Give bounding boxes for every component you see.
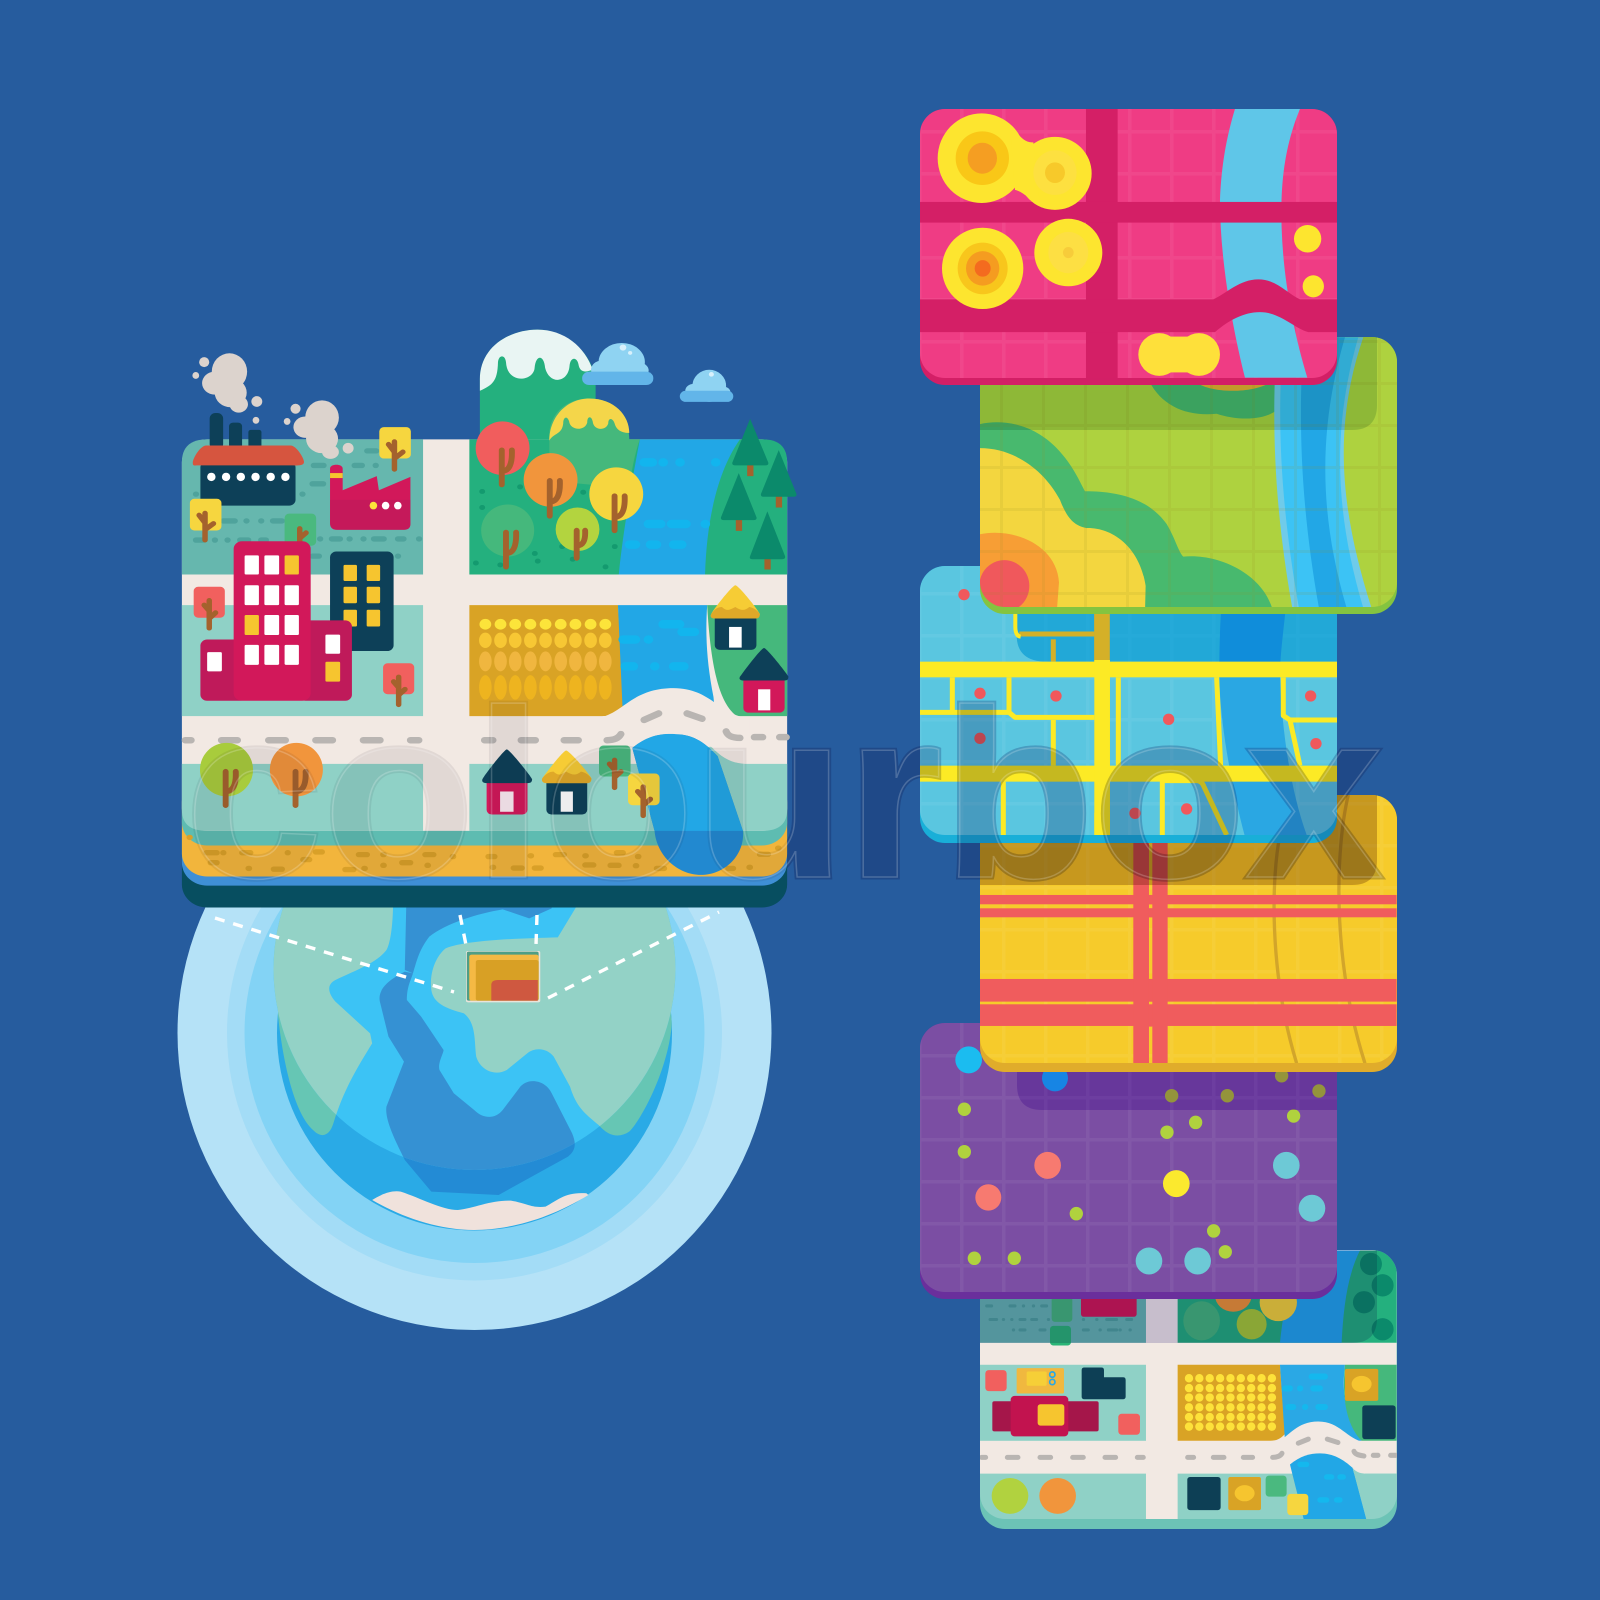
card lip blue <box>920 566 1337 843</box>
riverside square trees <box>599 746 660 816</box>
polar ice <box>372 1191 588 1230</box>
card: green elevation map <box>979 337 1397 614</box>
card: pink heat map <box>920 109 1337 385</box>
watermark: colourbox <box>185 660 1383 928</box>
shadow from green card <box>1016 614 1337 662</box>
yellow card face <box>980 795 1397 1063</box>
watermark <box>192 700 1386 882</box>
industrial block ground marks <box>196 451 419 556</box>
top-left industrial block <box>182 439 423 574</box>
river upper <box>619 439 740 574</box>
park block <box>469 439 787 574</box>
card lip green <box>980 337 1397 614</box>
shadow from yellow card <box>1017 1070 1337 1110</box>
card lip yellow <box>980 795 1397 1072</box>
river middle <box>618 605 716 718</box>
pink office building <box>200 541 352 701</box>
globe earth shaded <box>277 1012 672 1230</box>
globe outer atmosphere <box>178 736 772 1330</box>
infographic scene <box>178 109 1397 1529</box>
shadow from pink card <box>980 337 1377 430</box>
river upper ripples <box>629 462 716 545</box>
river middle ripples <box>623 624 695 666</box>
bottom-right block <box>469 747 787 831</box>
cloud large <box>582 343 653 385</box>
mid-left block <box>182 605 423 716</box>
park dots <box>476 487 615 567</box>
watermark: colourbox <box>185 660 1383 928</box>
card: blue street network <box>920 560 1337 843</box>
map base layers <box>182 439 787 907</box>
smoke cloud right <box>284 400 354 459</box>
house red riverside <box>740 648 788 713</box>
house thatched centre <box>542 751 591 814</box>
card: yellow road map <box>980 795 1397 1072</box>
globe earth lit <box>274 908 676 1170</box>
bridge <box>598 688 749 749</box>
dark tower <box>330 552 394 651</box>
house thatched riverside <box>711 585 760 650</box>
card lip pink <box>920 109 1337 385</box>
green card face <box>979 337 1397 613</box>
factory with chimneys <box>193 413 304 506</box>
cloud small <box>680 370 733 402</box>
shadow from blue card <box>980 795 1377 885</box>
smoke cloud left <box>192 353 262 424</box>
park trees <box>476 421 643 567</box>
globe inner atmosphere <box>244 803 704 1263</box>
road lane marks <box>185 713 786 740</box>
pink card face <box>920 109 1337 381</box>
card: purple points of interest <box>920 1023 1337 1299</box>
waterfall <box>632 734 743 875</box>
card lip purple <box>920 1023 1337 1299</box>
house red centre <box>482 749 532 814</box>
dashed zoom lines <box>215 912 719 998</box>
bottom-left block <box>182 764 423 831</box>
watermark: colourbox <box>185 660 1383 928</box>
blue card face <box>920 560 1337 837</box>
roadside round trees <box>200 743 323 805</box>
square trees <box>190 427 414 705</box>
panel: detailed city map <box>182 330 797 907</box>
riverside green bank <box>707 605 787 716</box>
globe middle atmosphere <box>227 786 722 1280</box>
purple card face <box>920 1023 1337 1292</box>
pine trees <box>721 419 797 570</box>
panel: globe <box>178 907 772 1330</box>
card: street map (bottom of stack) <box>980 1250 1397 1529</box>
mountain with snow <box>480 330 596 446</box>
corn field <box>469 605 624 716</box>
location marker on globe <box>466 951 540 1002</box>
shadow from purple card <box>980 1250 1377 1343</box>
hill with yellow cap <box>549 398 640 488</box>
red factory <box>330 465 410 530</box>
map card face <box>980 1250 1397 1521</box>
dirt layer marks <box>189 837 779 870</box>
card lip teal <box>980 1250 1397 1529</box>
